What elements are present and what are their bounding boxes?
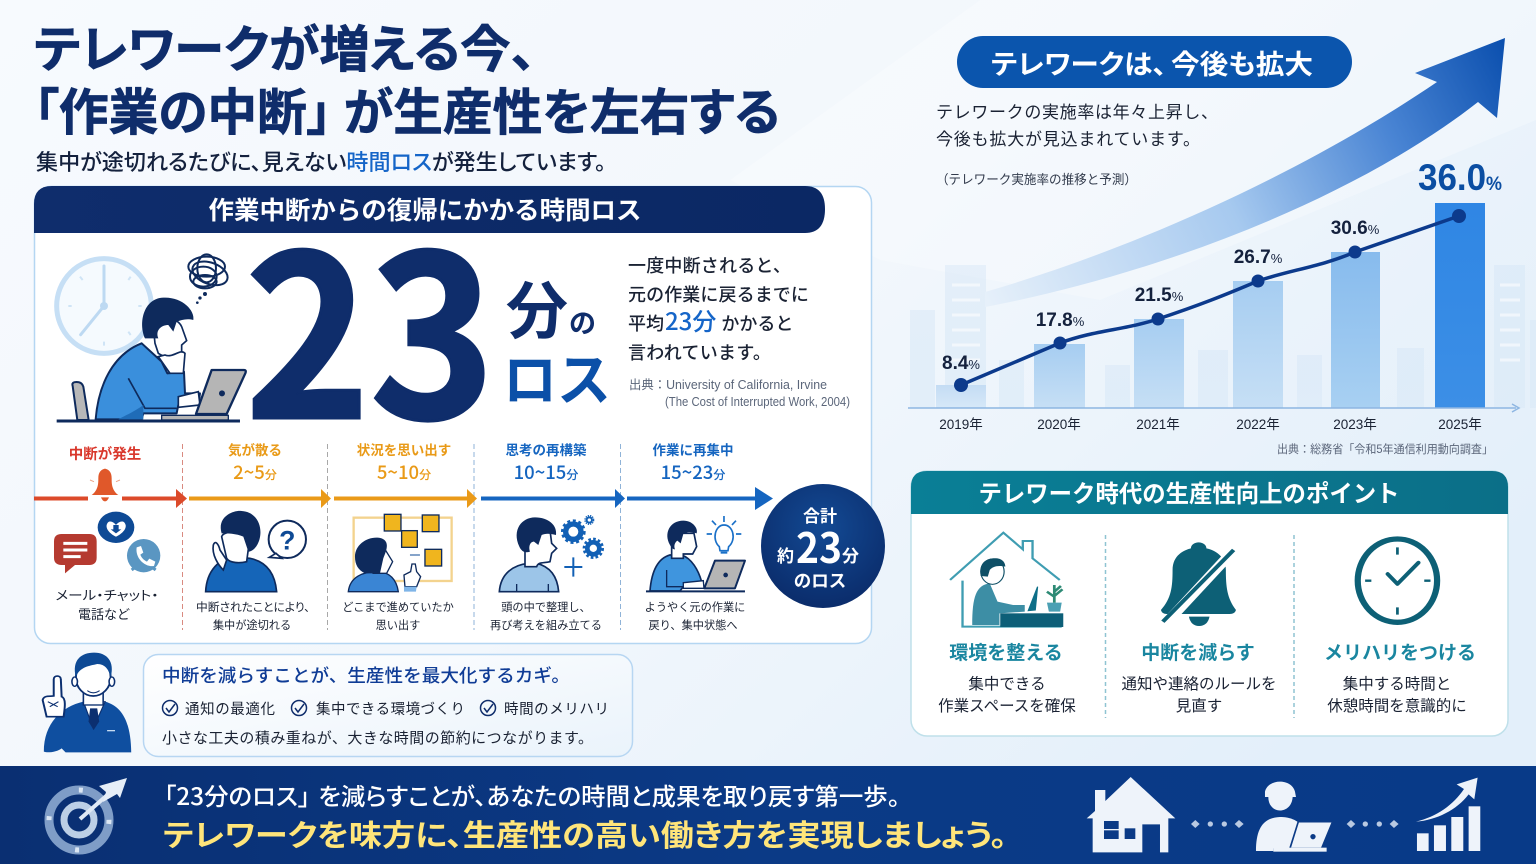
step 3: recalling <box>342 442 454 632</box>
unit: minutes of loss: 分 <box>506 278 568 347</box>
checklist <box>162 700 609 718</box>
step 1: interruption: 電話など <box>78 607 130 622</box>
icon: house, worker, growth chart <box>1087 777 1480 852</box>
step 4: rebuilding thought: 10~15分 <box>514 459 578 485</box>
panel heading <box>911 471 1508 514</box>
source note: 出典：University of California, Irvine <box>629 378 827 392</box>
total badge <box>761 484 885 608</box>
value labels: 17.8% <box>1036 310 1085 331</box>
year labels <box>939 417 1482 432</box>
unit: minutes of loss: の <box>569 309 596 339</box>
panel: time loss <box>34 158 885 644</box>
panel heading: テレワーク時代の生産性向上のポイント <box>978 481 1400 508</box>
step 2: distraction: 集中が途切れる <box>213 618 291 632</box>
icon: home office <box>950 533 1063 627</box>
timeline arrows <box>34 444 773 630</box>
big number 23: 23 <box>245 158 495 483</box>
step 5: refocusing: ようやく元の作業に <box>645 601 745 614</box>
source note <box>629 378 850 409</box>
point 2: reduce interruptions: 見直す <box>1176 697 1222 715</box>
total badge: 合計 <box>803 507 837 526</box>
icon: target with arrow <box>49 778 127 850</box>
checklist: 通知の最適化 <box>185 701 276 718</box>
step 2: distraction: 2~5分 <box>233 459 277 485</box>
year labels: 2019年 <box>939 417 983 432</box>
year labels: 2022年 <box>1236 417 1280 432</box>
callout: key message: 中断を減らすことが、生産性を最大化するカギ。 <box>162 665 570 686</box>
total badge: 23 <box>796 515 842 576</box>
panel heading: 作業中断からの復帰にかかる時間ロス <box>208 197 642 225</box>
step 3: recalling: どこまで進めていたか <box>342 601 454 614</box>
step 1: interruption <box>54 445 160 622</box>
value labels: 30.6% <box>1331 218 1380 239</box>
checklist: 時間のメリハリ <box>504 701 609 718</box>
step 2: distraction: 気が散る <box>228 442 282 458</box>
panel heading <box>34 186 825 233</box>
subtitle: 集中が途切れるたびに、見えない時間ロスが発生しています。 <box>36 150 606 175</box>
point 2: reduce interruptions: 通知や連絡のルールを <box>1121 675 1277 693</box>
total badge: 約 <box>777 547 794 566</box>
heading pill <box>957 36 1352 88</box>
total badge: 分 <box>842 547 859 566</box>
growth description: テレワークの実施率は年々上昇し、 <box>936 103 1218 122</box>
growth arrow <box>985 38 1505 307</box>
callout: key message <box>144 654 632 756</box>
step 5: refocusing: 戻り、集中状態へ <box>648 618 738 632</box>
title: 「作業の中断」が生産性を左右する <box>34 85 780 141</box>
step 1: interruption: メール・チャット・ <box>56 588 158 603</box>
step 4: rebuilding thought <box>490 442 603 632</box>
step 2: distraction: 中断されたことにより、 <box>196 601 310 614</box>
total badge: のロス <box>794 571 846 591</box>
icon: alarm bell <box>90 469 120 501</box>
panel: footer banner <box>0 766 1536 864</box>
point 1: environment: 集中できる <box>968 675 1046 693</box>
icon: email chat phone bubbles <box>54 512 160 573</box>
icon: person with gears <box>499 516 603 592</box>
growth description: 今後も拡大が見込まれています。 <box>936 130 1200 149</box>
step 5: refocusing: 作業に再集中 <box>652 442 734 458</box>
icon: person at laptop with light bulb <box>646 516 745 591</box>
growth description <box>936 103 1218 149</box>
icon: worried worker with clock <box>57 254 246 421</box>
value labels: 8.4% <box>942 353 980 374</box>
panel: productivity points <box>911 471 1508 736</box>
explanation text <box>628 256 809 363</box>
panel: footer banner: テレワークを味方に、生産性の高い働き方を実現しましょう。 <box>163 820 1007 853</box>
point 2: reduce interruptions: 中断を減らす <box>1141 641 1255 664</box>
year labels: 2025年 <box>1438 417 1482 432</box>
step 4: rebuilding thought: 思考の再構築 <box>506 442 587 458</box>
icon: confused person: ? <box>279 525 295 555</box>
icon: confused person <box>206 511 306 592</box>
step 3: recalling: 状況を思い出す <box>357 442 451 458</box>
point 3: balance: 休憩時間を意識的に <box>1327 697 1467 715</box>
step 4: rebuilding thought: 頭の中で整理し、 <box>501 600 591 614</box>
explanation text: 元の作業に戻るまでに <box>628 285 809 305</box>
step 3: recalling: 5~10分 <box>377 459 431 485</box>
point 3: balance: 集中する時間と <box>1343 675 1451 693</box>
point 1: environment: 環境を整える <box>949 642 1063 664</box>
callout: key message: 小さな工夫の積み重ねが、大きな時間の節約につながります。 <box>162 730 593 747</box>
point 1: environment <box>938 533 1076 715</box>
explanation text: 一度中断されると、 <box>628 256 791 276</box>
value labels <box>942 157 1502 374</box>
value labels: 21.5% <box>1135 285 1184 306</box>
value labels: 36.0% <box>1418 157 1502 198</box>
point 2: reduce interruptions <box>1121 542 1277 715</box>
step 3: recalling: 思い出す <box>376 619 420 632</box>
icon: businessman pointing up <box>43 653 131 752</box>
chart source: 出典：総務省「令和5年通信利用動向調査」 <box>1277 442 1493 456</box>
step 1: interruption: 中断が発生 <box>69 445 141 463</box>
step 4: rebuilding thought: 再び考えを組み立てる <box>490 618 602 632</box>
value labels: 26.7% <box>1234 247 1283 268</box>
step 5: refocusing <box>645 442 745 632</box>
year labels: 2023年 <box>1333 417 1377 432</box>
background skyline <box>910 265 1536 408</box>
unit: minutes of loss: ロス <box>503 349 611 413</box>
point 3: balance: メリハリをつける <box>1324 642 1476 664</box>
icon: muted bell <box>1161 542 1239 627</box>
explanation text: 平均23分 かかると <box>628 302 793 337</box>
heading pill: テレワークは、 今後も拡大 <box>991 50 1313 80</box>
explanation text: 言われています。 <box>628 343 771 363</box>
source note: (The Cost of Interrupted Work, 2004) <box>665 395 850 409</box>
title <box>34 22 780 141</box>
chart caption: （テレワーク実施率の推移と予測） <box>936 172 1137 187</box>
year labels: 2020年 <box>1037 417 1081 432</box>
step 5: refocusing: 15~23分 <box>661 459 725 485</box>
unit: minutes of loss <box>503 278 611 413</box>
year labels: 2021年 <box>1136 417 1180 432</box>
panel: footer banner: 「23分のロス」 を減らすことが、あなたの時間と成果を取り戻す第一歩。 <box>164 777 900 812</box>
checklist: 集中できる環境づくり <box>316 701 465 718</box>
title: テレワークが増える今、 <box>34 22 536 78</box>
point 1: environment: 作業スペースを確保 <box>938 697 1076 715</box>
icon: sticky note board <box>348 514 452 592</box>
point 3: balance <box>1324 539 1476 715</box>
icon: clock with check <box>1358 539 1437 622</box>
bar and line chart <box>908 157 1519 432</box>
step 2: distraction <box>196 442 310 632</box>
